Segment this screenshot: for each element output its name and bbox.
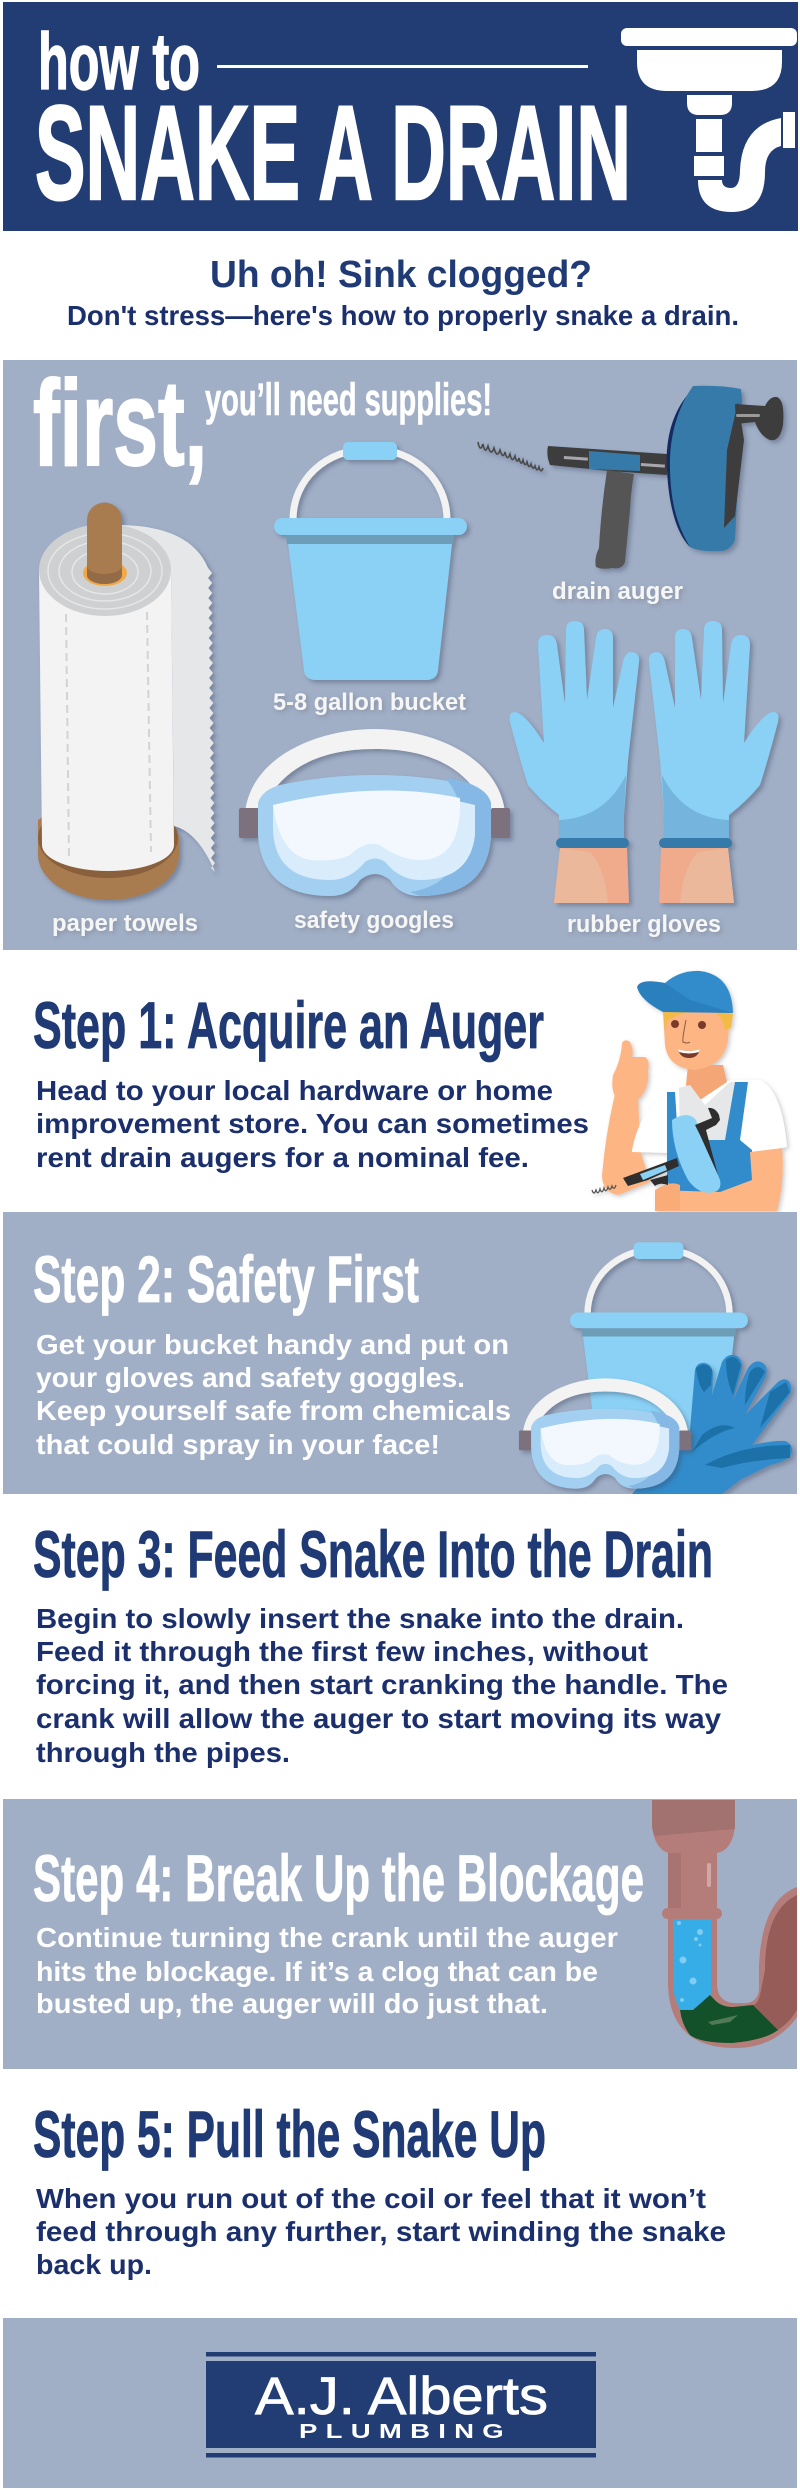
icon: sink and trap [621, 28, 797, 212]
label: paper towels: paper towels [52, 910, 198, 937]
text: step 5 body: When you run out of the coil or feel that it won’t [36, 2183, 706, 2214]
step 1 section [33, 971, 787, 1211]
text: step 1 body: rent drain augers for a nominal fee. [36, 1142, 529, 1173]
text: step 2 body: your gloves and safety goggles. [36, 1362, 465, 1393]
icon: bucket [274, 442, 467, 680]
text: step 3 body [36, 1603, 728, 1768]
label: goggles: safety googles [294, 907, 454, 934]
heading: first: first, [33, 355, 207, 491]
text: step 5 body: feed through any further, start winding the snake [36, 2216, 726, 2247]
text: step 5 body [36, 2183, 726, 2280]
heading: how to: how to [38, 17, 200, 106]
panel: step 4 [3, 1799, 797, 2069]
icon: rubber gloves [510, 621, 778, 903]
heading: step 1: Step 1: Acquire an Auger [33, 988, 544, 1062]
logo: A.J. Alberts Plumbing: PLUMBING [299, 2421, 512, 2443]
intro text [67, 254, 739, 331]
step 3 section [33, 1517, 728, 1768]
label: drain auger: drain auger [552, 578, 683, 605]
logo: A.J. Alberts Plumbing: A.J. Alberts [255, 2367, 548, 2426]
logo: A.J. Alberts Plumbing [206, 2352, 596, 2458]
text: step 4 body: busted up, the auger will do just that. [36, 1988, 548, 2019]
text: step 2 body [36, 1329, 511, 1460]
text: step 3 body: Begin to slowly insert the snake into the drain. [36, 1603, 684, 1634]
text: step 4 body: Continue turning the crank until the auger [36, 1922, 618, 1953]
text: step 3 body: through the pipes. [36, 1737, 290, 1768]
text: step 3 body: Feed it through the first few inches, without [36, 1636, 648, 1667]
intro text: Uh oh! Sink clogged? [210, 254, 592, 296]
panel: step 2 [3, 1212, 797, 1494]
icon: paper towels [38, 503, 215, 900]
label: bucket: 5-8 gallon bucket [273, 689, 466, 716]
text: step 3 body: forcing it, and then start cranking the handle. The [36, 1669, 728, 1700]
label: rubber gloves: rubber gloves [567, 911, 721, 938]
text: step 2 body: Get your bucket handy and put on [36, 1329, 509, 1360]
panel: supplies [3, 355, 797, 950]
panel: footer [3, 2318, 797, 2488]
text: step 2 body: that could spray in your face! [36, 1429, 440, 1460]
text: step 3 body: crank will allow the auger to start moving its way [36, 1703, 721, 1734]
text: step 4 body [36, 1922, 618, 2019]
text: step 1 body: Head to your local hardware or home [36, 1075, 553, 1106]
illustration: clogged pipe [652, 1800, 797, 2048]
heading: step 2: Step 2: Safety First [33, 1242, 419, 1316]
panel: header banner [3, 2, 798, 231]
illustration: plumber with auger [592, 971, 787, 1211]
icon: goggles [239, 729, 510, 896]
icon: drain auger [478, 386, 783, 569]
heading: you'll need supplies: you’ll need supplies! [205, 374, 492, 425]
text: step 4 body: hits the blockage. If it’s a clog that can be [36, 1956, 598, 1987]
step 5 section [33, 2097, 726, 2280]
text: step 1 body: improvement store. You can sometimes [36, 1108, 589, 1139]
text: step 2 body: Keep yourself safe from chemicals [36, 1395, 511, 1426]
intro text: Don't stress—here's how to properly snake a drain. [67, 300, 739, 331]
text: step 5 body: back up. [36, 2249, 152, 2280]
illustration: bucket, goggles and glove [519, 1242, 792, 1494]
text: step 1 body [36, 1075, 589, 1173]
